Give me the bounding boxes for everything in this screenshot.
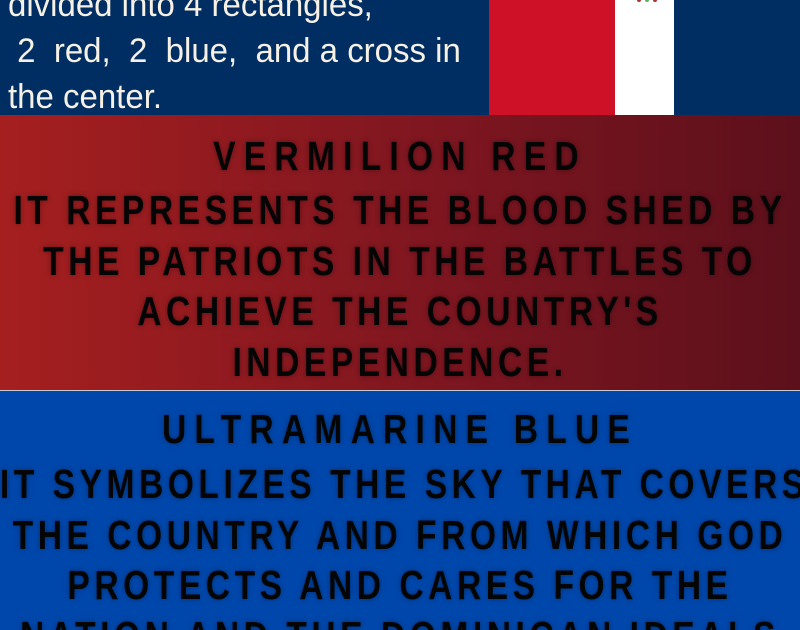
text block: red meaning: THE PATRIOTS IN THE BATTLES TO [43, 238, 757, 284]
panel: vermilion red [0, 115, 800, 390]
icon: flag [489, 0, 674, 115]
text block: blue meaning: THE COUNTRY AND FROM WHICH GOD [13, 512, 787, 558]
text block: blue meaning: PROTECTS AND CARES FOR THE [67, 562, 733, 608]
text block: flag description: the center. [8, 78, 162, 115]
text block: flag description: 2 red, 2 blue, and a cross in [17, 32, 461, 70]
text block: flag description [8, 0, 461, 115]
text block: red meaning: ACHIEVE THE COUNTRY'S [137, 288, 663, 334]
panel: intro [0, 0, 800, 115]
text block: blue meaning [0, 461, 800, 630]
text block: red meaning: IT REPRESENTS THE BLOOD SHED BY [13, 187, 787, 233]
heading: ultramarine blue: ULTRAMARINE BLUE [162, 406, 638, 452]
text block: blue meaning: IT SYMBOLIZES THE SKY THAT COVERS [0, 461, 800, 507]
panel: ultramarine blue [0, 391, 800, 630]
heading: vermilion red: VERMILION RED [213, 133, 587, 179]
text block: red meaning [13, 187, 787, 384]
text block: red meaning: INDEPENDENCE. [232, 338, 568, 384]
